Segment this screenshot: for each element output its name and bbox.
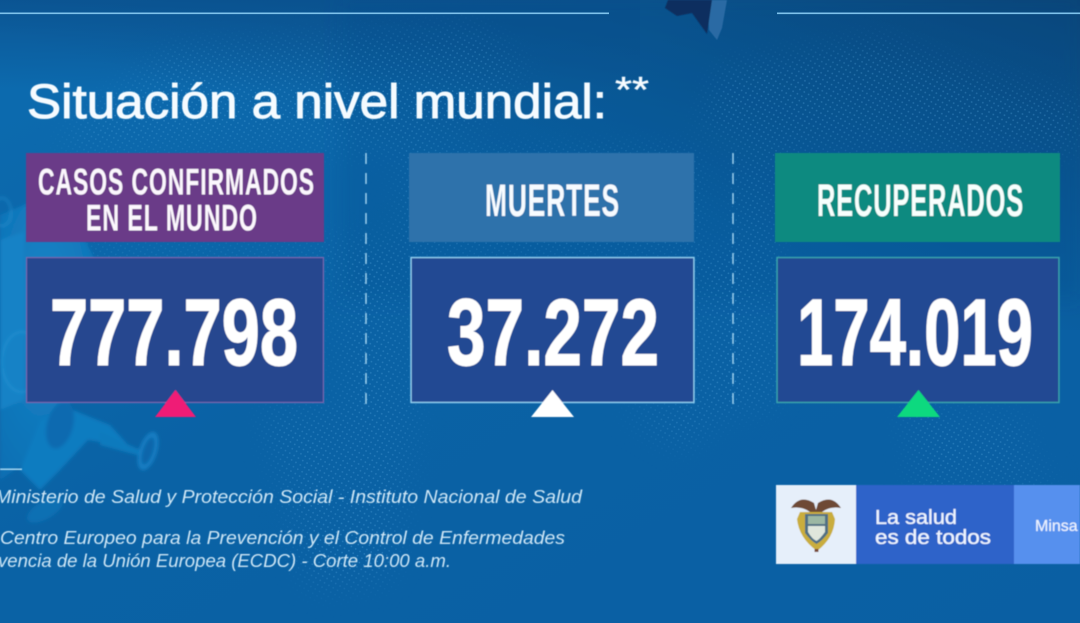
source line 3: vencia de la Unión Europea (ECDC) - Corte 10:00 a.m. [0,550,451,571]
panel: recuperados [775,153,1060,417]
source rule [0,468,22,470]
logo: slogan panel: La salud [875,507,957,529]
icon: white up triangle [531,390,574,417]
logo: slogan panel [856,485,1014,564]
value: recuperados [777,258,1059,402]
logo: ministry panel: Minsa [1035,518,1078,535]
icon: green up triangle [897,390,940,417]
header: casos confirmados: CASOS CONFIRMADOS [38,162,315,202]
value: casos confirmados [26,258,324,402]
top rules [0,12,1080,14]
icon: colombian coat of arms [791,499,841,552]
header: muertes [409,153,694,242]
logo: ministry panel [1014,485,1080,564]
logo block [776,485,1080,564]
sources text [0,486,583,571]
header: recuperados [775,153,1060,242]
value: muertes: 37.272 [447,280,659,386]
panel: casos confirmados [26,153,324,417]
header: casos confirmados: EN EL MUNDO [86,198,258,238]
header: casos confirmados [26,153,324,242]
column dividers [366,153,733,404]
panel: muertes [409,153,694,417]
icon: pink up triangle [155,390,196,417]
source line 2: Centro Europeo para la Prevención y el Control de Enfermedades [0,527,565,548]
value: muertes [411,258,694,402]
virus illustration [0,190,163,528]
value: casos confirmados: 777.798 [50,280,298,386]
title: Situación a nivel mundial: [27,76,607,129]
logo: slogan panel: es de todos [875,527,991,549]
footnote marker: ** [615,69,649,110]
ribbon [665,0,727,40]
source line 1: Ministerio de Salud y Protección Social - Instituto Nacional de Salud [0,486,583,507]
header: muertes: MUERTES [485,175,620,226]
logo: crest panel [776,485,856,564]
